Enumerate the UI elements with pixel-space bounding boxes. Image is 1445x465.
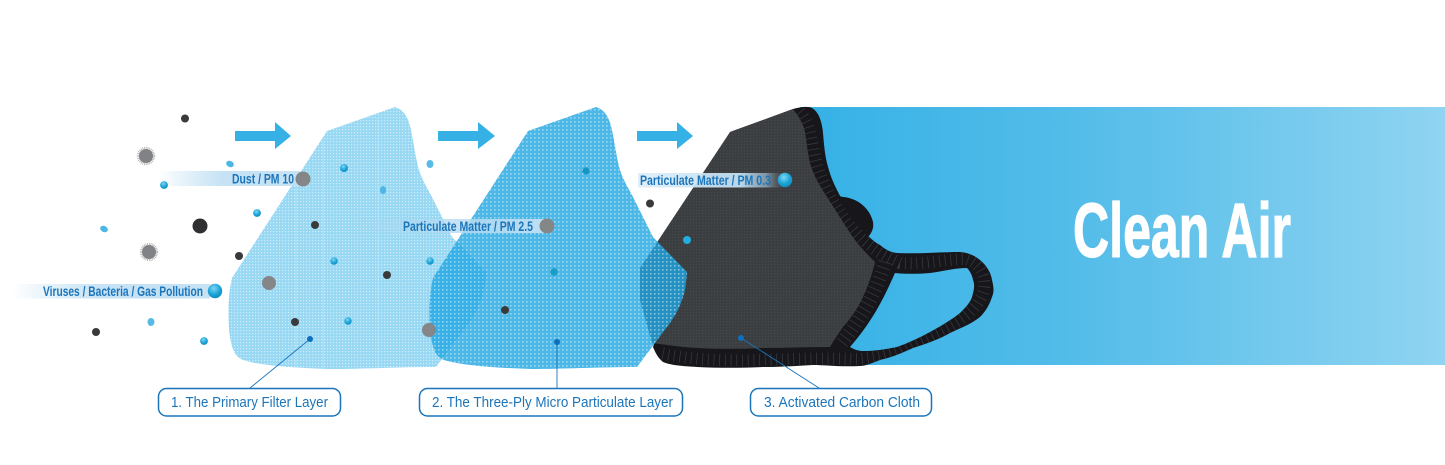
blue clean air band (800, 107, 1445, 365)
label band: PM 2.5 (345, 219, 545, 233)
label: Particulate Matter / PM 0.3: Particulate Matter / PM 0.3 (640, 173, 771, 188)
mask layer 3: activated carbon cloth (640, 107, 994, 368)
trim stitching (660, 112, 984, 360)
label band: Dust (158, 171, 300, 186)
free particles on the left (92, 114, 691, 345)
callout: three-ply micro particulate layer (420, 339, 682, 416)
callout: primary filter layer (158, 336, 340, 416)
mask layer 2: three-ply micro particulate (429, 107, 687, 369)
heading: Clean Air: Clean Air (1073, 188, 1291, 274)
callout: activated carbon cloth: 3. Activated Carbon Cloth (764, 395, 920, 411)
label: Dust / PM 10: Dust / PM 10 (232, 172, 294, 186)
arrow 1 (235, 122, 291, 149)
arrow 2 (438, 122, 495, 149)
particles on layer 2 (422, 167, 590, 337)
rear ear loop (835, 195, 873, 236)
label: Viruses / Bacteria / Gas Pollution: Viruses / Bacteria / Gas Pollution (43, 284, 203, 299)
mask layer 1: primary filter (228, 107, 486, 369)
label: Particulate Matter / PM 2.5: Particulate Matter / PM 2.5 (403, 219, 533, 234)
arrow 3 (637, 122, 693, 149)
mask trim and strap (653, 107, 994, 368)
mask face fabric (640, 109, 875, 349)
callout: three-ply micro particulate layer: 2. The Three-Ply Micro Particulate Layer (432, 395, 673, 411)
callout: activated carbon cloth (738, 335, 932, 416)
particles beneath layer 2 (253, 164, 434, 326)
callout: primary filter layer: 1. The Primary Filter Layer (171, 395, 328, 411)
